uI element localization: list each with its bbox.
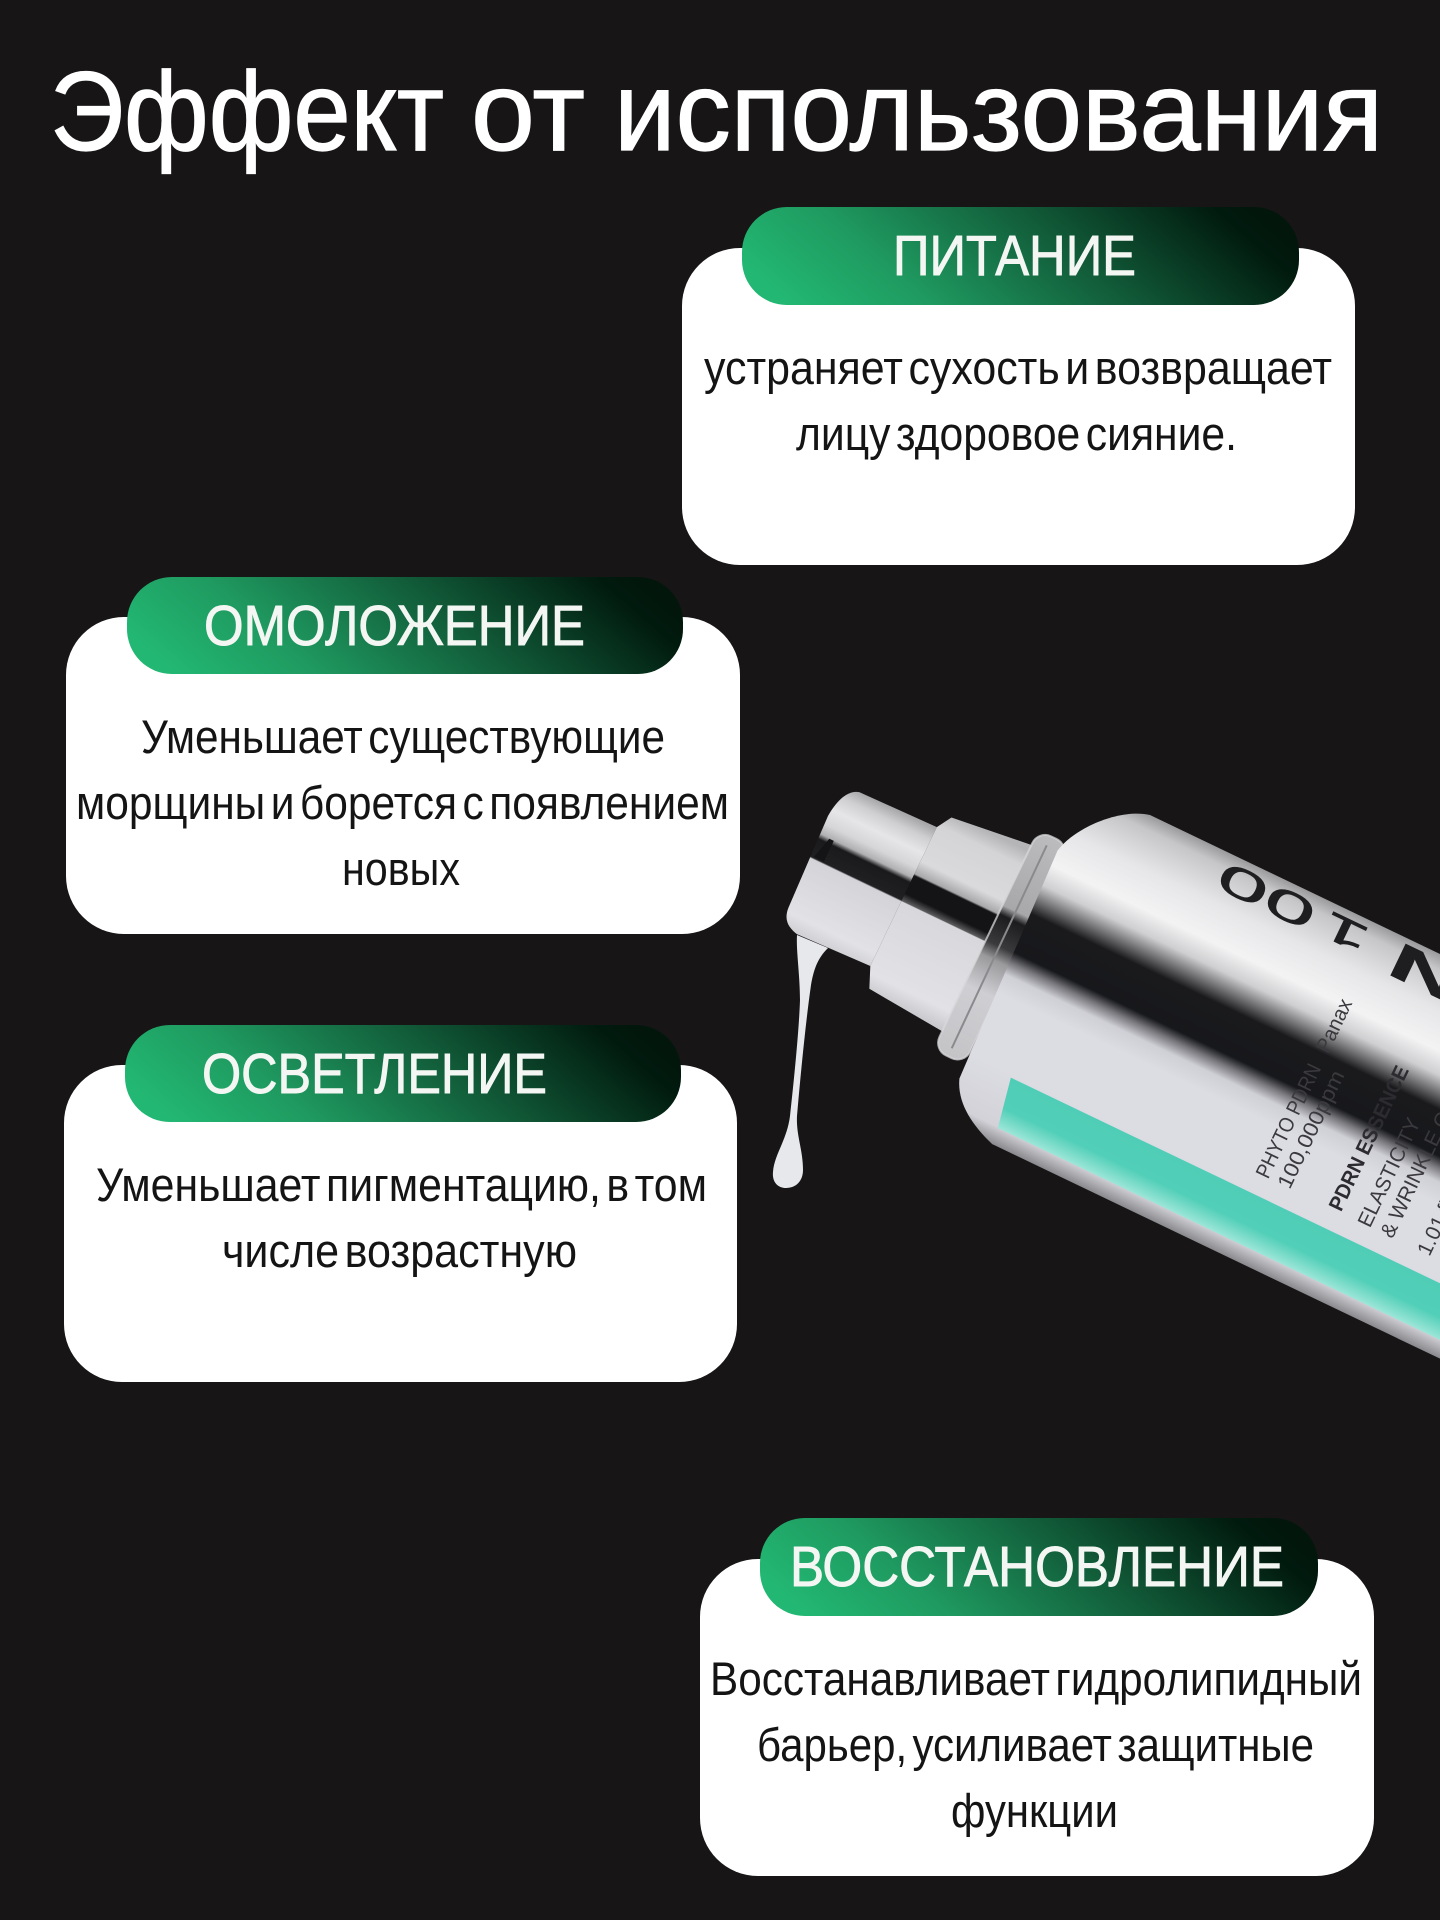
panel: омоложение xyxy=(66,577,740,934)
description: устраняет сухость и возвращает xyxy=(704,341,1332,394)
description: Восстанавливает гидролипидный xyxy=(710,1652,1362,1705)
drip of essence xyxy=(773,935,828,1188)
pump cap xyxy=(776,783,937,969)
description: Уменьшает пигментацию, в том xyxy=(96,1158,707,1211)
cap rim reflection xyxy=(814,836,834,862)
product image: pump bottle with drip xyxy=(731,685,1440,1473)
bottle label text xyxy=(1109,849,1440,1259)
card xyxy=(66,617,740,934)
pill heading xyxy=(127,577,683,674)
description: Уменьшает существующие xyxy=(141,710,665,763)
description: числе возрастную xyxy=(222,1224,577,1277)
panel: питание xyxy=(682,207,1355,565)
glass ring xyxy=(933,830,1069,1064)
bottle xyxy=(731,685,1440,1473)
description: новых xyxy=(342,842,460,895)
heading text: ВОССТАНОВЛЕНИЕ xyxy=(790,1535,1284,1599)
brand number one: 1 xyxy=(1317,899,1378,959)
ingredient text: ELASTICITY xyxy=(1354,1114,1425,1231)
description: барьер, усиливает защитные xyxy=(757,1718,1314,1771)
pill heading xyxy=(742,207,1299,305)
ingredient text: Panax xyxy=(1312,995,1357,1057)
title: использования xyxy=(614,49,1383,174)
card xyxy=(64,1065,737,1382)
title: Эффект xyxy=(50,49,444,174)
card xyxy=(682,248,1355,565)
description: лицу здоровое сияние. xyxy=(796,407,1237,460)
teal label stripe xyxy=(989,1078,1440,1457)
card xyxy=(700,1559,1374,1876)
description xyxy=(76,710,729,895)
bottle body xyxy=(931,786,1440,1473)
ingredient text: PHYTO PDRN xyxy=(1252,1060,1326,1182)
heading text: ОМОЛОЖЕНИЕ xyxy=(204,594,585,658)
description xyxy=(96,1158,707,1277)
title xyxy=(50,49,1383,174)
pill heading xyxy=(125,1025,681,1122)
panel: осветление xyxy=(64,1025,737,1382)
pill heading xyxy=(760,1518,1318,1616)
description xyxy=(710,1652,1362,1837)
heading text: ОСВЕТЛЕНИЕ xyxy=(202,1042,547,1106)
description: функции xyxy=(951,1784,1118,1837)
ingredient text: PDRN ESSENCE xyxy=(1325,1062,1414,1215)
ingredient text xyxy=(1252,995,1440,1259)
pump collar xyxy=(858,805,1033,1032)
panel: восстановление xyxy=(700,1518,1374,1876)
title: от xyxy=(471,49,585,174)
brand number zeros: 00 xyxy=(1209,852,1324,939)
description: морщины и борется с появлением xyxy=(76,776,729,829)
heading text: ПИТАНИЕ xyxy=(893,224,1136,288)
description xyxy=(704,341,1332,460)
ingredient text: 100,000ppm xyxy=(1273,1067,1349,1192)
